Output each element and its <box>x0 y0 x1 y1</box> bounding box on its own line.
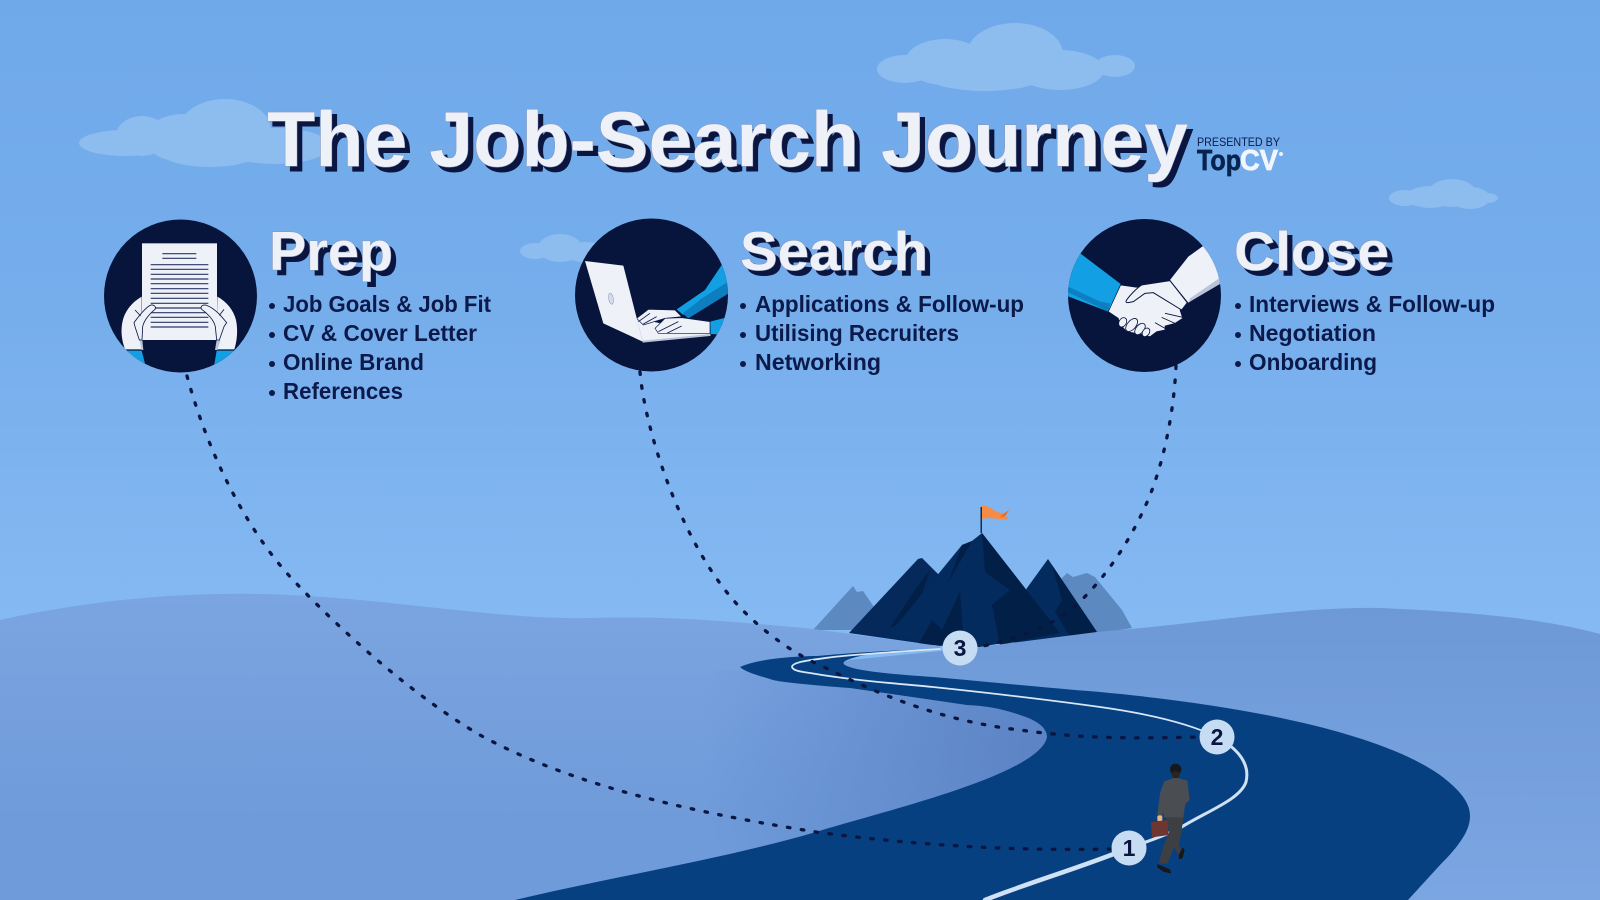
walking businessman <box>1151 764 1190 873</box>
cloud: right <box>1389 179 1498 209</box>
heading: Prep: Prep <box>274 225 398 287</box>
dashed connector: Close to 3 <box>978 366 1176 647</box>
presented by TopCV logo <box>1197 137 1283 177</box>
list: Prep items <box>269 291 491 404</box>
icon: handshake <box>1060 219 1227 372</box>
list: Search items: Applications & Follow-up <box>755 291 1024 317</box>
icon: hands typing on laptop <box>575 218 737 372</box>
step marker 2: 2 <box>1211 724 1223 750</box>
presented by TopCV logo: CV <box>1240 145 1279 177</box>
list: Prep items: Online Brand <box>283 349 424 375</box>
side peaks <box>849 558 990 646</box>
panel: Search <box>575 218 1024 375</box>
hill: right <box>700 608 1600 900</box>
list: Prep items: References <box>283 378 403 404</box>
list: Close items: Negotiation <box>1249 320 1376 346</box>
cloud: small centre <box>520 234 607 262</box>
step marker 1 <box>1112 830 1146 866</box>
dashed connector: Search to 2 <box>640 372 1199 738</box>
presented by TopCV logo: PRESENTED BY <box>1197 137 1280 149</box>
heading: Prep: Prep <box>269 220 393 282</box>
step marker 1: 1 <box>1123 835 1136 861</box>
panel: Prep <box>104 220 491 404</box>
heading: Search: Search <box>740 220 928 282</box>
cloud: top centre <box>877 23 1135 91</box>
icon: hands holding document <box>104 220 257 372</box>
presented by TopCV logo: Top <box>1197 145 1241 177</box>
step marker 2 <box>1200 720 1234 754</box>
list: Prep items: Job Goals & Job Fit <box>283 291 491 317</box>
cloud: upper left <box>79 99 330 167</box>
list: Prep items: CV & Cover Letter <box>283 320 477 346</box>
road <box>515 649 1470 900</box>
main peak <box>890 533 1060 647</box>
heading: Close: Close <box>1239 225 1394 287</box>
flag <box>980 506 1009 533</box>
list: Search items: Utilising Recruiters <box>755 320 959 346</box>
heading: Search: Search <box>745 225 933 287</box>
road centre line <box>792 649 1247 900</box>
step marker 3: 3 <box>954 635 966 661</box>
dashed connector: Prep to 1 <box>187 376 1112 849</box>
list: Close items <box>1235 291 1495 375</box>
title shadow and text: The Job-Search Journey <box>267 95 1188 183</box>
hill: left <box>0 594 1060 900</box>
list: Close items: Interviews & Follow-up <box>1249 291 1495 317</box>
step marker 3 <box>942 630 978 666</box>
title shadow and text: The Job-Search Journey <box>272 100 1193 188</box>
panel: Close <box>1060 219 1495 375</box>
list: Close items: Onboarding <box>1249 349 1377 375</box>
heading: Close: Close <box>1234 220 1389 282</box>
list: Search items <box>740 291 1024 375</box>
mountains with flag <box>813 506 1132 647</box>
back ridges <box>813 573 1132 640</box>
list: Search items: Networking <box>755 349 881 375</box>
